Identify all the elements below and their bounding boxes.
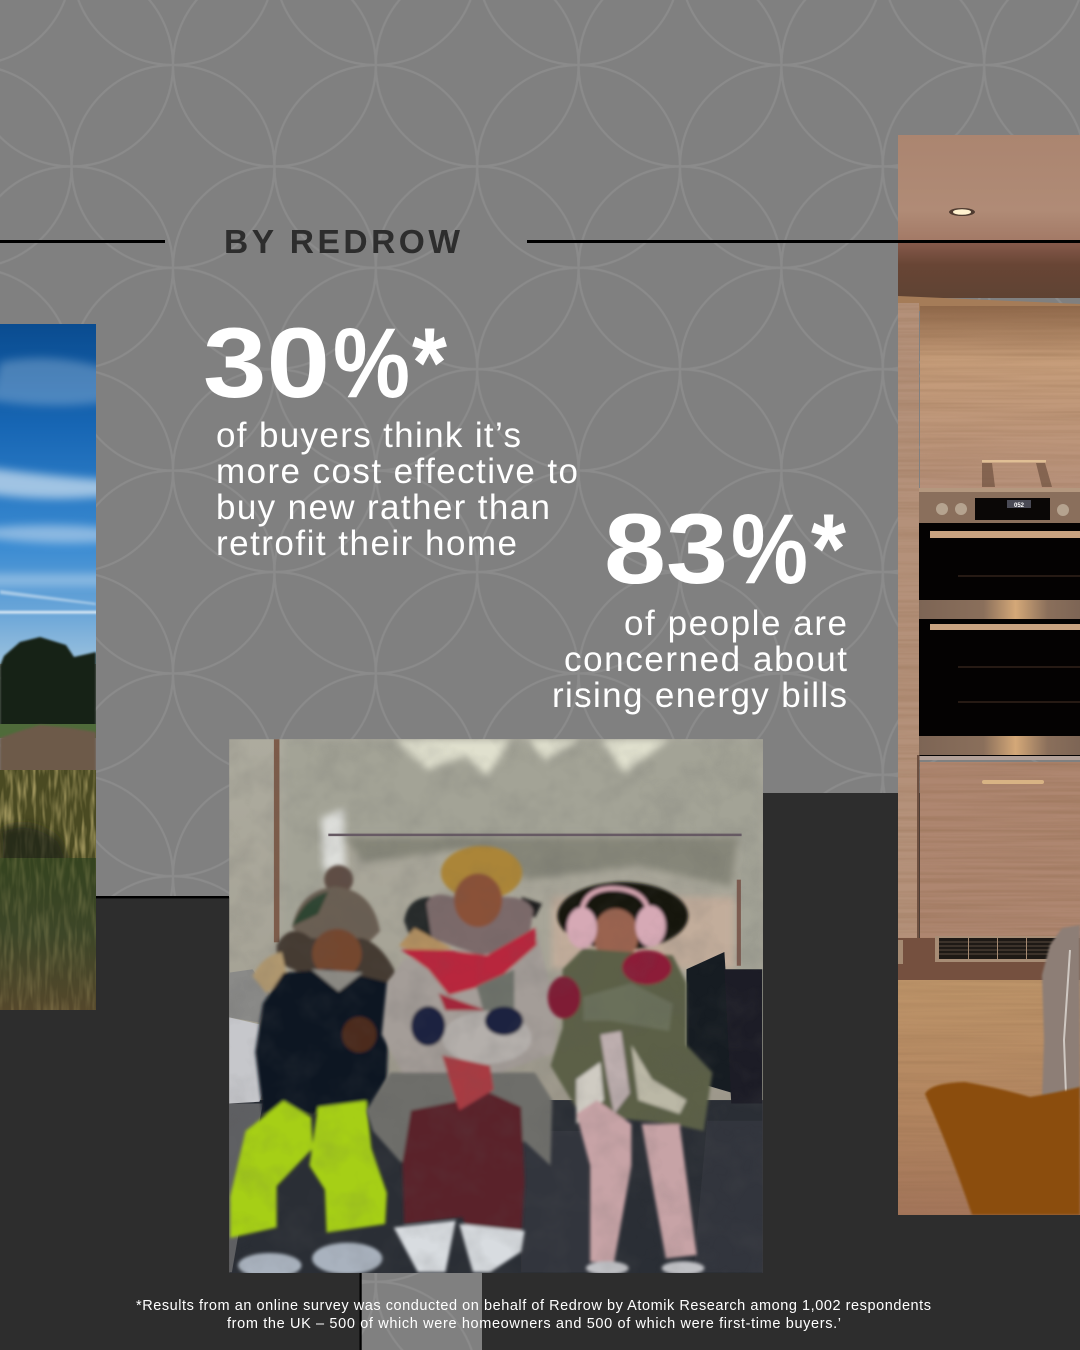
stat figure 83%: *	[811, 493, 846, 604]
grey sofa arm	[1042, 925, 1080, 1098]
kitchen ceiling	[898, 135, 1080, 243]
rule beside bottom grey strip	[360, 1273, 362, 1350]
heading: by redrow: BY REDROW	[224, 224, 460, 261]
mustard cushion	[925, 1082, 1080, 1215]
heading rule right	[527, 240, 1080, 243]
stat figure 30%: %	[333, 307, 410, 418]
rule under grey panel	[96, 896, 229, 898]
ceiling downlight	[949, 208, 975, 216]
photo: countryside landscape	[0, 324, 106, 1010]
footnote: *Results from an online survey was conducted on behalf of Redrow by Atomik Research among 1,002 respondents	[136, 1298, 931, 1314]
damp wall	[229, 739, 763, 1273]
stat: 30 percent	[203, 307, 578, 563]
heading rule left	[0, 240, 165, 243]
tall side panel	[898, 303, 919, 1003]
woman in red scarf	[366, 846, 556, 1272]
lower cabinet	[920, 762, 1080, 939]
stat figure 83%	[604, 493, 846, 604]
upper cabinet	[920, 306, 1080, 490]
footnote	[136, 1298, 931, 1332]
girl with pink earmuffs	[548, 882, 712, 1275]
stat text: energy bills	[552, 604, 847, 715]
stat text: buyers retrofit	[216, 416, 578, 563]
double oven	[919, 488, 1080, 760]
plinth and vent	[898, 936, 1080, 983]
stat text: buyers retrofit: retrofit their home	[216, 524, 517, 563]
footnote: from the UK – 500 of which were homeowners and 500 of which were first-time buyers.’	[227, 1316, 841, 1332]
stat: 83 percent	[552, 493, 847, 715]
stat text: energy bills: rising energy bills	[552, 676, 847, 715]
stat figure 83%: 83	[604, 493, 728, 604]
stat figure 30%: *	[412, 307, 447, 418]
stat text: energy bills: concerned about	[564, 640, 847, 679]
photo: fitted kitchen with oven	[898, 135, 1080, 1215]
stat text: buyers retrofit: more cost effective to	[216, 452, 578, 491]
stat figure 30%	[203, 307, 447, 418]
photo: family sitting in coats in a cold room	[229, 739, 763, 1278]
stat figure 30%: 30	[203, 307, 330, 418]
wood floor	[898, 980, 1080, 1215]
dark lower panels	[0, 793, 1080, 1350]
stat text: energy bills: of people are	[624, 604, 847, 643]
stat text: buyers retrofit: of buyers think it’s	[216, 416, 521, 455]
stat figure 83%: %	[731, 493, 808, 604]
boy in lime trousers	[230, 865, 397, 1278]
stat text: buyers retrofit: buy new rather than	[216, 488, 550, 527]
photo grain overlay	[229, 739, 763, 1273]
sofa and cushions	[229, 952, 763, 1276]
double oven: 052	[1014, 503, 1025, 509]
